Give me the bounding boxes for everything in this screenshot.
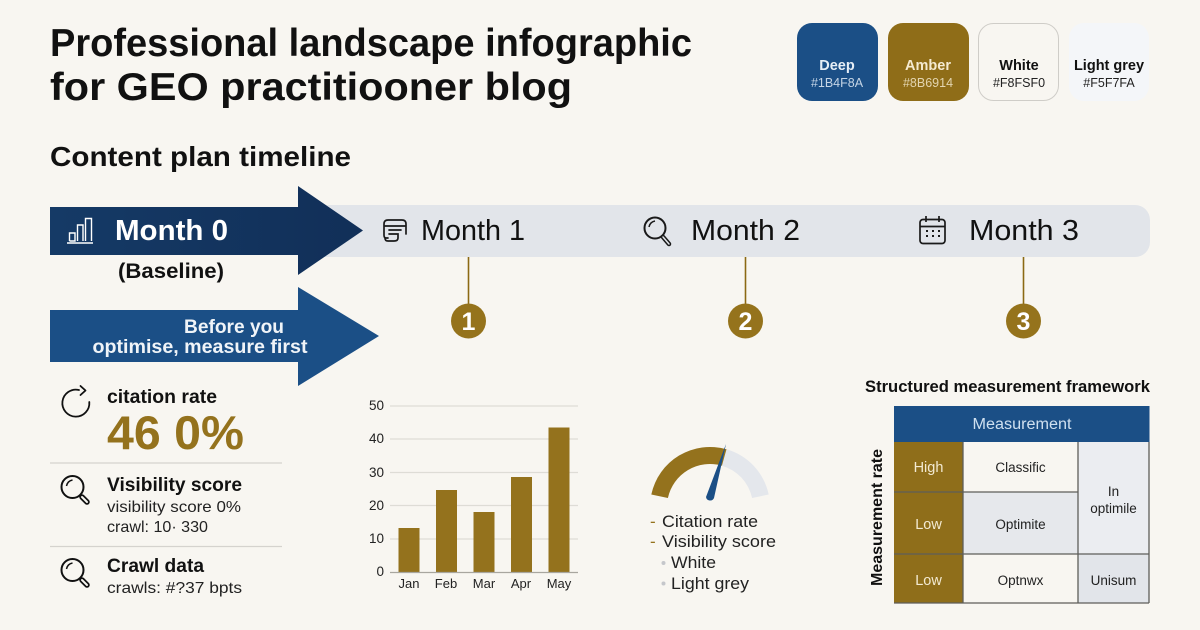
matrix table	[894, 406, 1150, 603]
metric: citation rate: 46 0%	[107, 406, 244, 459]
x axis labels: Feb	[435, 576, 457, 591]
swatch: deep	[797, 23, 878, 101]
gauge legend: Visibility score	[662, 532, 776, 551]
cell text: Optimite	[995, 517, 1046, 532]
gauge	[651, 444, 769, 501]
gauge legend: -	[650, 532, 656, 551]
metric: citation rate: citation rate	[107, 387, 217, 408]
cell text	[995, 460, 1137, 588]
arrow: before you optimise: Before you	[184, 317, 284, 338]
swatch: light grey	[1069, 23, 1149, 101]
needle	[706, 444, 726, 501]
milestone 2: 2	[739, 308, 752, 336]
swatch: white	[978, 24, 1058, 100]
month 3 label: Month 3	[969, 215, 1079, 247]
x axis labels: May	[547, 576, 572, 591]
timeline track	[300, 205, 1150, 257]
bars	[398, 428, 570, 572]
matrix table: Low	[915, 517, 942, 533]
title: Professional landscape infographic	[50, 22, 692, 65]
metric: visibility score	[62, 475, 242, 536]
icon: magnifier	[62, 476, 87, 502]
arrow: before you optimise	[50, 287, 379, 386]
metric: citation rate	[62, 386, 244, 459]
y axis labels: 0	[376, 564, 384, 579]
y axis labels: 30	[369, 465, 384, 480]
y axis labels: 50	[369, 398, 384, 413]
gauge legend: Light grey	[671, 574, 750, 593]
table header	[894, 406, 1150, 442]
y axis labels: 10	[369, 531, 384, 546]
row label column	[894, 442, 963, 603]
metric: visibility score: crawl: 10· 330	[107, 519, 208, 536]
milestone 3: 3	[1017, 308, 1030, 336]
swatch: deep: Deep	[819, 58, 855, 74]
swatch: amber	[888, 23, 969, 101]
swatch: amber: #8B6914	[903, 76, 953, 90]
icon: bar chart	[67, 218, 93, 243]
y axis labels: 20	[369, 498, 384, 513]
icon: magnifier	[644, 218, 669, 244]
arrow: month 0	[50, 186, 363, 275]
metric: crawl data: crawls: #?37 bpts	[107, 580, 242, 597]
colour palette	[797, 23, 1149, 101]
grid	[894, 442, 1149, 603]
milestone 2	[728, 257, 763, 338]
month 3 label	[920, 215, 1079, 247]
x axis labels: Jan	[399, 576, 419, 591]
icon: magnifier	[62, 559, 87, 585]
heading: content plan timeline: Content plan timeline	[50, 141, 351, 172]
gauge legend	[650, 512, 776, 593]
matrix table: Low	[915, 573, 942, 589]
body cells	[963, 442, 1078, 492]
label: baseline: (Baseline)	[118, 260, 224, 283]
month 2 label	[644, 215, 800, 247]
heading: structured measurement framework: Structured measurement framework	[865, 377, 1151, 396]
cell text: optimile	[1090, 501, 1137, 516]
metric: crawl data: Crawl data	[107, 556, 204, 577]
matrix table: Measurement	[972, 416, 1072, 433]
x axis labels: Mar	[473, 576, 496, 591]
gauge legend: Citation rate	[662, 512, 758, 531]
gauge legend: -	[650, 512, 656, 531]
title: for GEO practitiooner blog	[50, 66, 572, 109]
metric: visibility score: Visibility score	[107, 475, 242, 496]
x axis labels	[399, 576, 572, 591]
y axis labels	[369, 398, 384, 579]
icon: refresh	[62, 386, 89, 417]
swatch: deep: #1B4F8A	[811, 76, 864, 90]
month 2 label: Month 2	[691, 215, 800, 247]
swatch: white: White	[999, 58, 1039, 74]
icon: calendar	[920, 216, 945, 244]
swatch: light grey: Light grey	[1074, 58, 1144, 74]
gauge legend: White	[671, 553, 716, 572]
swatch: white: #F8FSF0	[993, 76, 1045, 90]
cell text: In	[1108, 484, 1119, 499]
title	[50, 22, 692, 109]
milestone 3	[1006, 257, 1041, 338]
swatch: light grey: #F5F7FA	[1083, 76, 1135, 90]
matrix table: High	[914, 460, 943, 476]
icon: document	[384, 220, 406, 241]
metric: crawl data	[62, 556, 242, 597]
milestone 1: 1	[462, 308, 476, 336]
metric: visibility score: visibility score 0%	[107, 499, 241, 516]
cell text: Optnwx	[998, 573, 1044, 588]
cell text: Classific	[995, 460, 1046, 475]
arrow: before you optimise: optimise, measure first	[92, 337, 308, 358]
bar chart	[369, 398, 578, 591]
arrow: month 0: Month 0	[115, 215, 228, 247]
milestone 1	[451, 257, 486, 338]
swatch: amber: Amber	[905, 58, 951, 74]
cell text: Unisum	[1091, 573, 1136, 588]
y axis labels: 40	[369, 431, 384, 446]
x axis labels: Apr	[511, 576, 532, 591]
axis label: measurement rate: Measurement rate	[869, 449, 886, 586]
month 1 label: Month 1	[421, 215, 525, 247]
